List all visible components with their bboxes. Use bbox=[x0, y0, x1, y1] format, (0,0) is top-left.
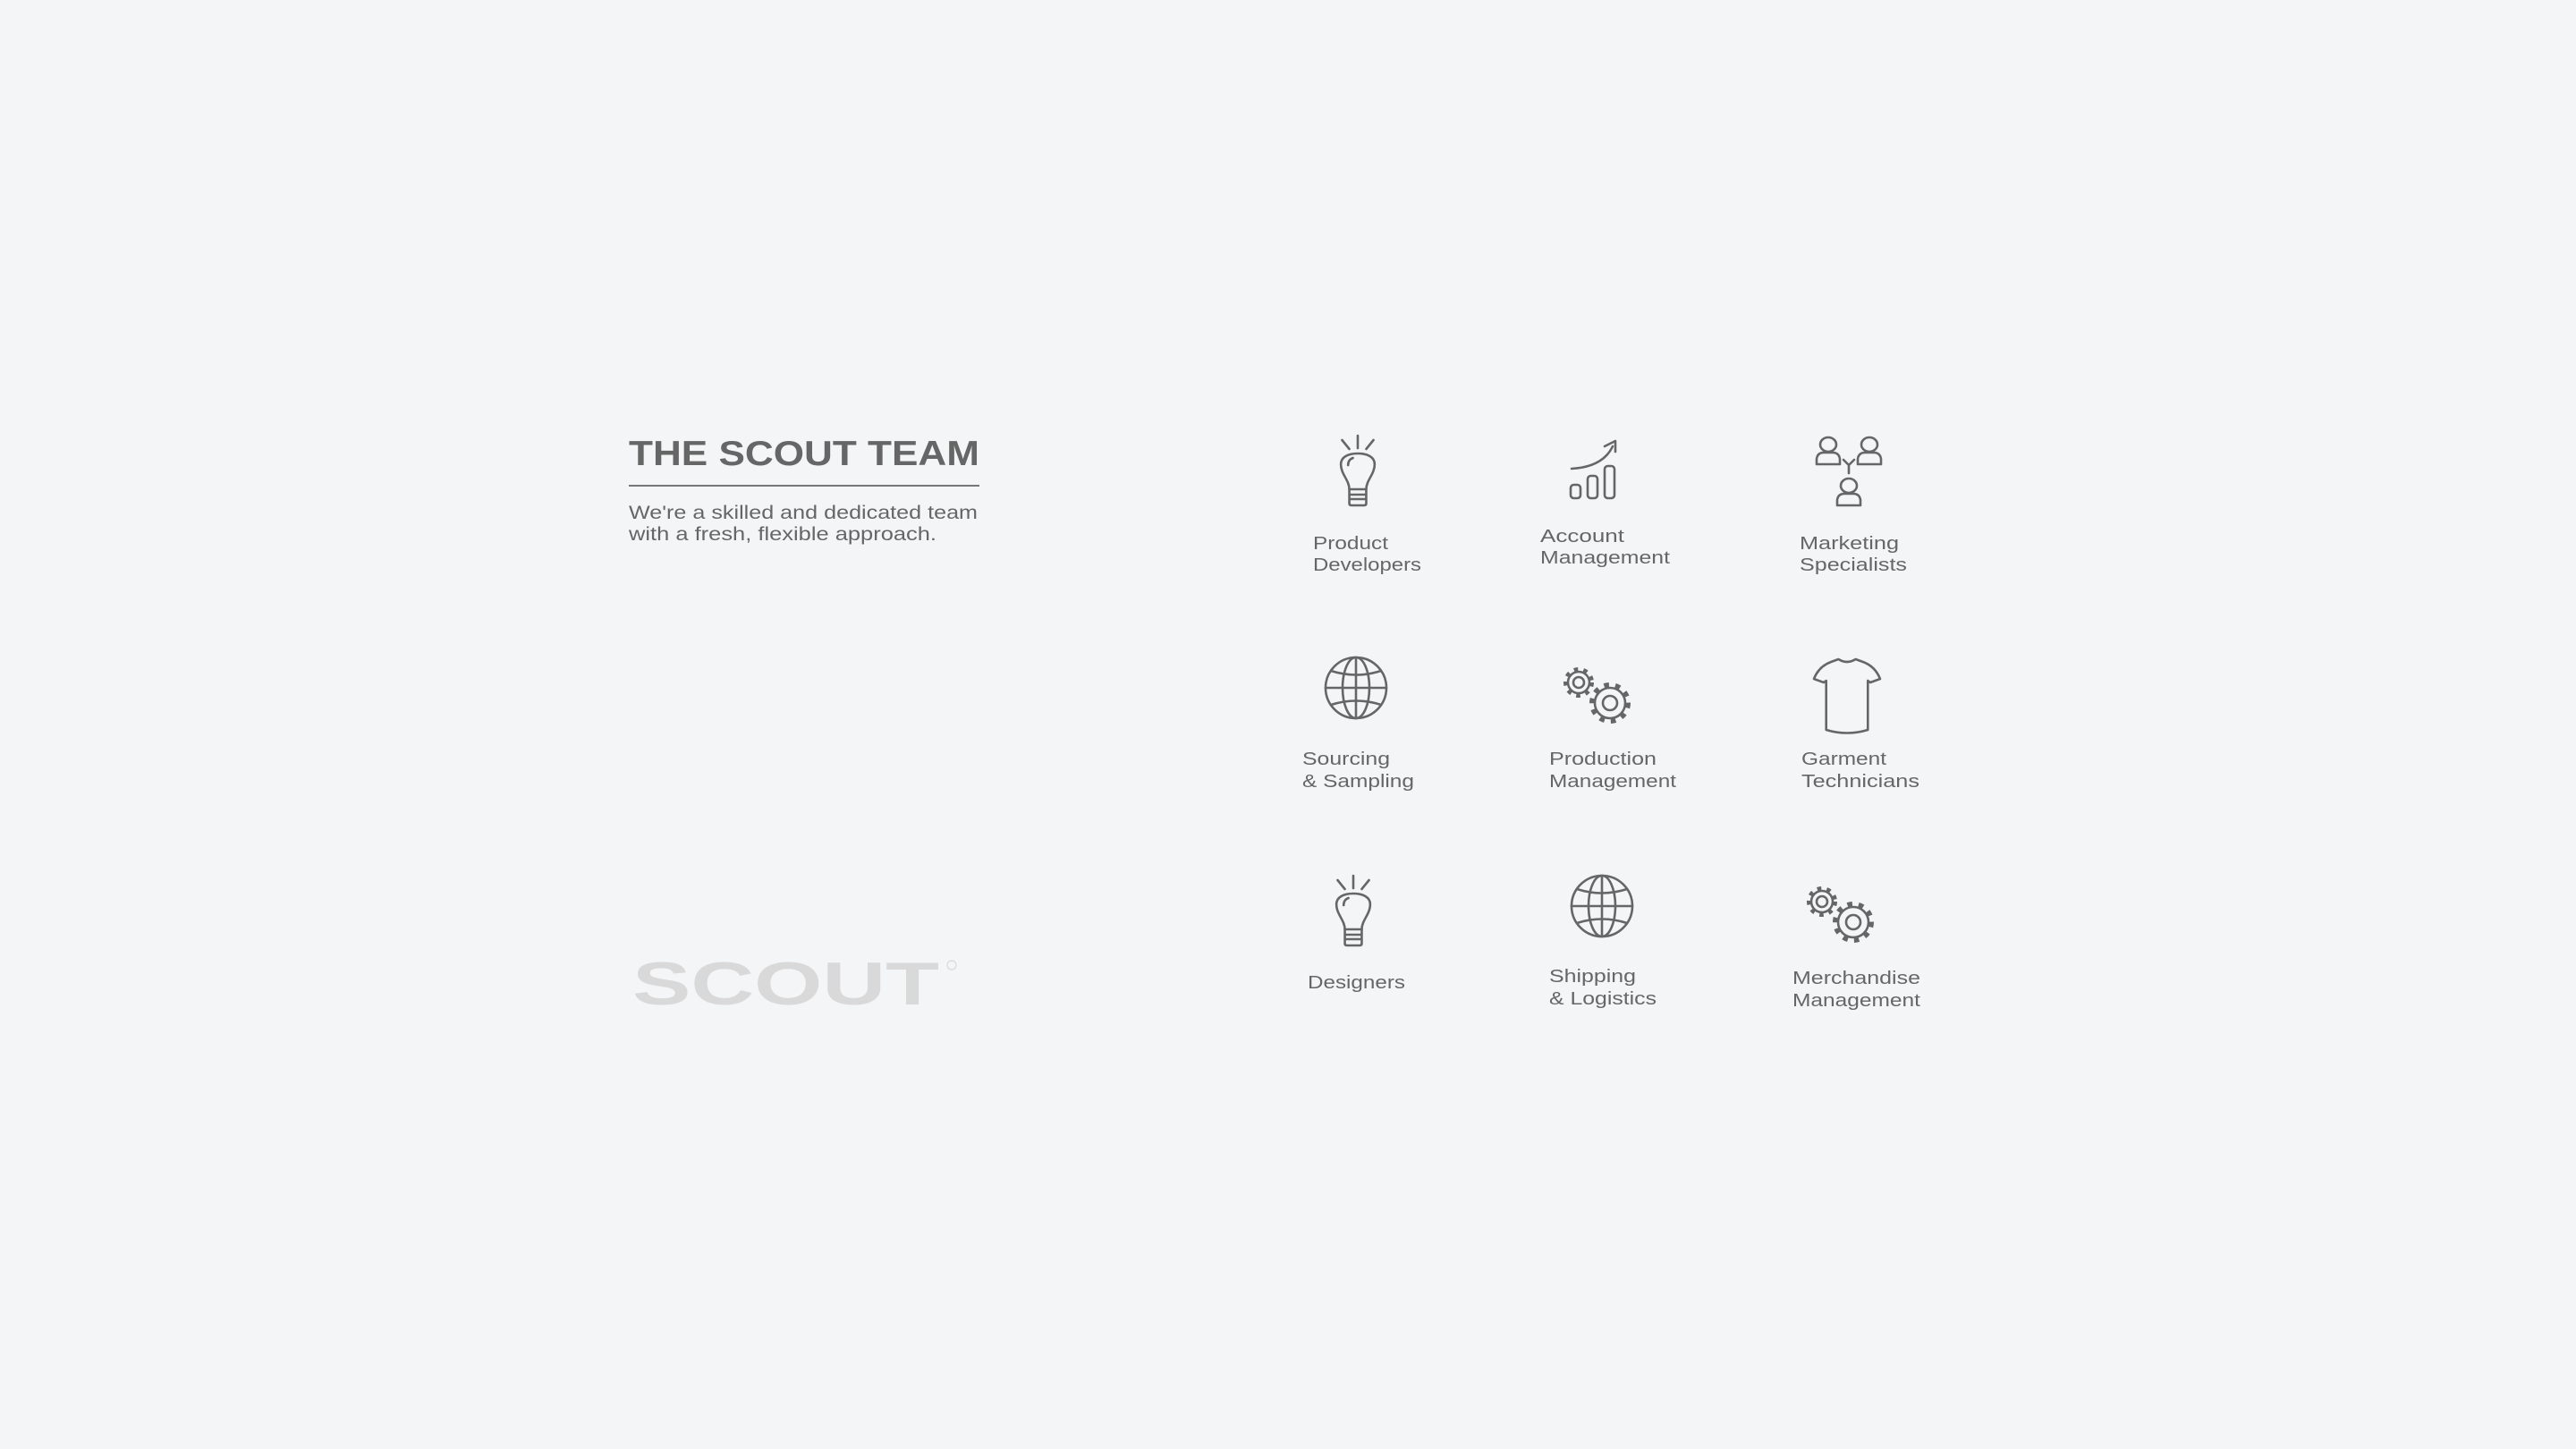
icon: growth chart bbox=[1571, 441, 1615, 498]
item: Sourcing & Sampling bbox=[1302, 657, 1414, 792]
subtitle: We're a skilled and dedicated team bbox=[629, 503, 978, 523]
item: Garment Technicians: Technicians bbox=[1801, 772, 1919, 792]
logo: SCOUT bbox=[632, 950, 956, 1018]
subtitle line 2: with a fresh, flexible approach. bbox=[628, 524, 936, 545]
item: Account Management: Management bbox=[1540, 548, 1671, 568]
icon: globe bbox=[1572, 876, 1632, 936]
item: Account Management bbox=[1540, 441, 1671, 568]
item: Product Developers: Product bbox=[1313, 534, 1389, 554]
item: Sourcing & Sampling: Sourcing bbox=[1302, 750, 1390, 769]
item: Merchandise Management bbox=[1792, 889, 1921, 1011]
item: Merchandise Management: Merchandise bbox=[1792, 969, 1920, 988]
logo: SCOUT: SCOUT bbox=[632, 950, 939, 1018]
item: Production Management: Production bbox=[1549, 750, 1657, 769]
item: Production Management: Management bbox=[1549, 772, 1677, 792]
item: Shipping & Logistics: & Logistics bbox=[1549, 989, 1657, 1009]
item: Shipping & Logistics bbox=[1549, 876, 1657, 1009]
icon: globe bbox=[1326, 657, 1386, 718]
icon: light bulb bbox=[1341, 436, 1375, 505]
item: Marketing Specialists: Marketing bbox=[1800, 534, 1899, 554]
title: THE SCOUT TEAM bbox=[629, 435, 979, 473]
item: Marketing Specialists: Specialists bbox=[1800, 555, 1907, 575]
icon: gears bbox=[1565, 669, 1628, 721]
icon: light bulb bbox=[1336, 876, 1370, 945]
item: Designers: Designers bbox=[1308, 973, 1405, 993]
icon: people network bbox=[1817, 437, 1881, 505]
item: Garment Technicians: Garment bbox=[1801, 750, 1887, 769]
item: Garment Technicians bbox=[1801, 659, 1919, 792]
item: Marketing Specialists bbox=[1800, 437, 1907, 575]
icon: t-shirt bbox=[1814, 659, 1880, 733]
item: Product Developers bbox=[1313, 436, 1421, 575]
item: Sourcing & Sampling: & Sampling bbox=[1302, 772, 1414, 792]
item: Production Management bbox=[1549, 669, 1677, 792]
item: Designers bbox=[1308, 876, 1405, 993]
icon: gears bbox=[1809, 889, 1871, 940]
item: Product Developers: Developers bbox=[1313, 555, 1421, 575]
item: Account Management: Account bbox=[1540, 527, 1625, 547]
item: Shipping & Logistics: Shipping bbox=[1549, 967, 1636, 987]
item: Merchandise Management: Management bbox=[1792, 991, 1921, 1011]
